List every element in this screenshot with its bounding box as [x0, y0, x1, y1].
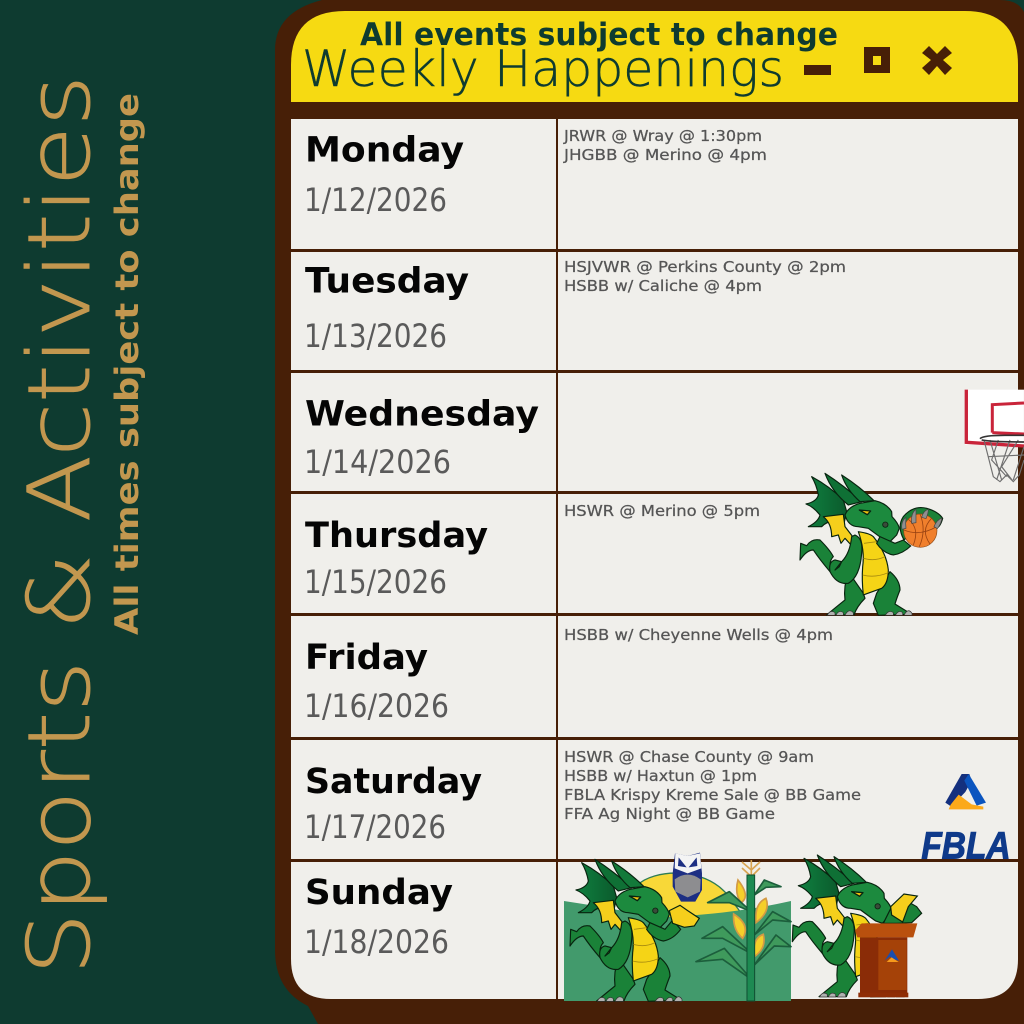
events: [564, 748, 861, 823]
row: Wednesday: [291, 373, 1018, 491]
day label: Friday: [305, 638, 428, 678]
events: HSBB w/ Cheyenne Wells @ 4pm: [564, 626, 833, 644]
day label: Saturday: [305, 762, 482, 802]
row: Sunday: [291, 862, 1018, 999]
events: HSJVWR @ Perkins County @ 2pm: [564, 258, 846, 276]
day label: Sunday: [305, 873, 453, 913]
row: Friday: [291, 616, 1018, 737]
date: 1/18/2026: [304, 923, 449, 961]
row: Saturday: [291, 740, 1018, 859]
hill: [564, 901, 791, 1001]
events: JRWR @ Wray @ 1:30pm: [563, 127, 762, 145]
sun: [638, 873, 743, 920]
events: [563, 127, 767, 164]
corn stalk: [696, 860, 791, 1001]
icon: minimize: [804, 65, 831, 75]
date: 1/17/2026: [304, 808, 446, 846]
arm: [877, 537, 911, 555]
icon: close: [922, 46, 952, 75]
hand: [900, 508, 943, 540]
hand with glove: [669, 905, 699, 927]
window frame: [275, 0, 1024, 1024]
header note: All events subject to change: [360, 17, 838, 53]
dragon: [570, 859, 682, 1001]
sidebar title: Sports & Activities: Sports & Activities: [10, 75, 110, 975]
events: HSWR @ Merino @ 5pm: [564, 502, 760, 520]
day label: Thursday: [305, 516, 488, 556]
sidebar subtitle: All times subject to change: [108, 93, 146, 635]
date: 1/13/2026: [304, 317, 447, 355]
header bar: [291, 11, 1018, 102]
events: [564, 258, 846, 295]
illustration: dragon with basketball: [800, 473, 943, 615]
row: Thursday: [291, 494, 1018, 613]
events: HSBB w/ Caliche @ 4pm: [564, 277, 762, 295]
date: 1/12/2026: [304, 181, 447, 219]
row: Tuesday: [291, 252, 1018, 370]
events: HSBB w/ Haxtun @ 1pm: [564, 767, 757, 785]
logo mark: [945, 774, 986, 809]
icon: basketball hoop: [965, 390, 1024, 482]
illustration: farm scene: [564, 853, 791, 1001]
events: HSWR @ Chase County @ 9am: [564, 748, 814, 766]
claws: [902, 509, 942, 529]
events: FBLA Krispy Kreme Sale @ BB Game: [564, 786, 861, 804]
date: 1/16/2026: [304, 687, 449, 725]
day label: Wednesday: [305, 394, 539, 434]
day label: Monday: [305, 130, 464, 170]
day label: Tuesday: [305, 262, 469, 302]
logo: FBLA: [921, 774, 1011, 868]
logo wordmark: FBLA: [921, 826, 1011, 868]
events: FFA Ag Night @ BB Game: [564, 805, 775, 823]
podium: [855, 923, 917, 997]
date: 1/15/2026: [304, 563, 447, 601]
basketball: [904, 514, 937, 547]
heading: Weekly Happenings: Weekly Happenings: [302, 40, 784, 98]
raised hand: [883, 900, 922, 923]
row: Monday: [291, 119, 1018, 249]
icon: maximize: [864, 47, 890, 73]
illustration: dragon at podium: [792, 855, 922, 997]
date: 1/14/2026: [304, 443, 451, 481]
owl: [673, 853, 702, 902]
events: JHGBB @ Merino @ 4pm: [563, 146, 767, 164]
